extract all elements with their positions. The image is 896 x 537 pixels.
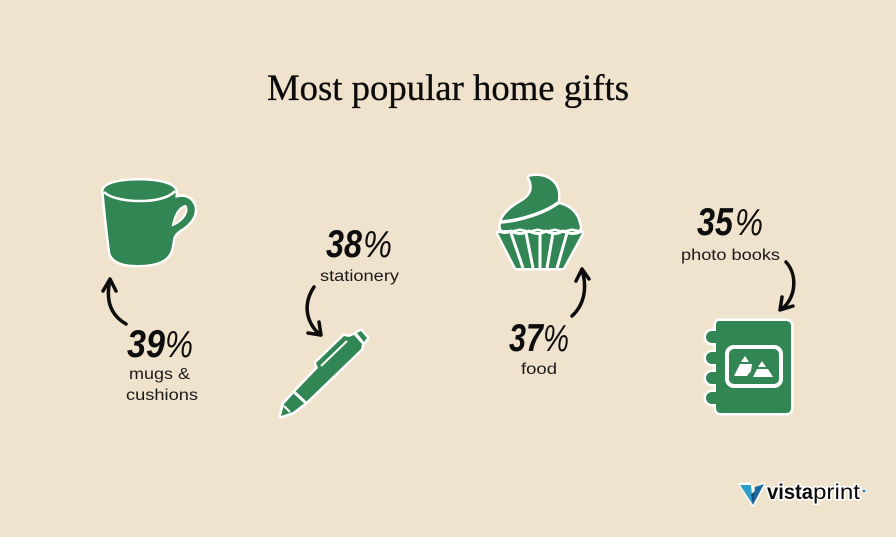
stat: 39% mugs and cushions: cushions <box>126 387 198 404</box>
stat: 35% photo books: photo books <box>681 247 780 264</box>
icon: cupcake <box>498 176 582 268</box>
icon: mug <box>104 180 195 265</box>
stat: 35% photo books <box>681 201 780 264</box>
stat: 39% mugs and cushions: mugs & <box>129 366 191 383</box>
stat: 37% food: % <box>543 318 569 360</box>
arrow: mug <box>103 279 126 324</box>
logo: vistaprint <box>740 481 866 505</box>
arrow: photo books <box>780 262 794 310</box>
stat: 39% mugs and cushions: % <box>165 324 193 366</box>
arrow: food <box>572 269 589 316</box>
logo: vistaprint: print <box>813 481 860 504</box>
icon: photo book <box>706 321 791 413</box>
stat: 39% mugs and cushions: 39 <box>127 323 165 366</box>
arrow: stationery <box>307 287 321 335</box>
stat: 37% food <box>509 317 569 378</box>
stat: 38% stationery: % <box>363 224 392 266</box>
stat: 37% food: food <box>521 361 557 378</box>
icon: pen <box>281 331 367 416</box>
title: Most popular home gifts <box>267 68 629 109</box>
stat: 38% stationery: 38 <box>326 223 362 266</box>
stat: 38% stationery: stationery <box>320 268 399 285</box>
stat: 39% mugs and cushions <box>126 323 198 404</box>
stat: 38% stationery <box>320 223 399 285</box>
stat: 37% food: 37 <box>509 317 545 360</box>
stat: 35% photo books: % <box>735 202 763 244</box>
logo: vistaprint: vista <box>767 481 813 504</box>
stat: 35% photo books: 35 <box>697 201 734 244</box>
